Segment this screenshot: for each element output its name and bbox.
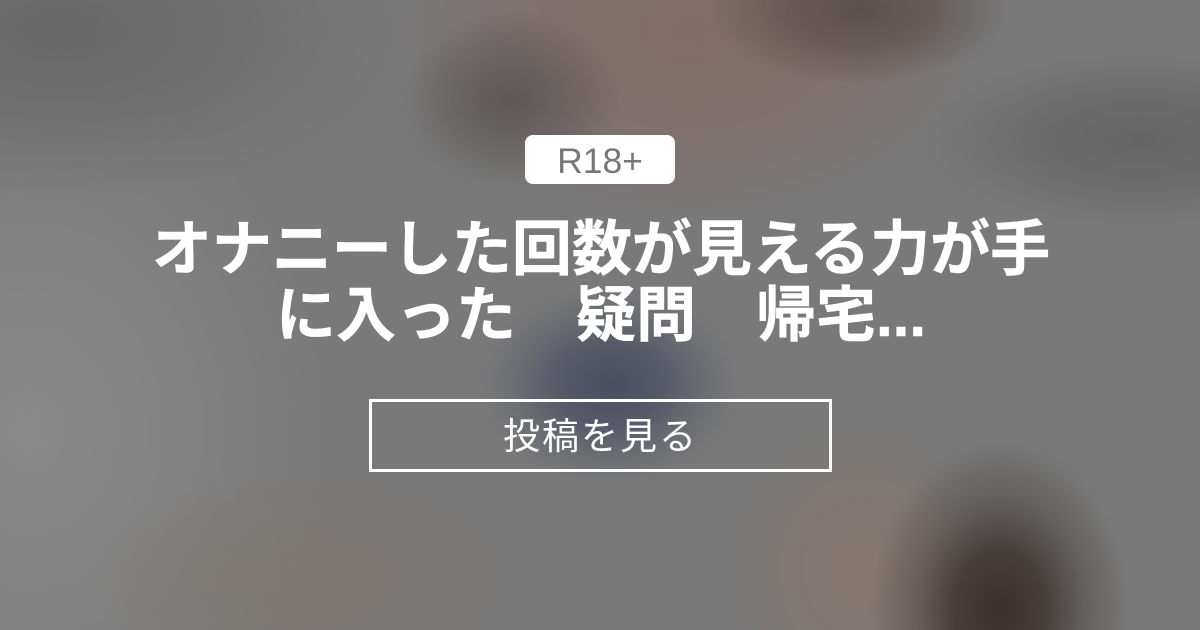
title: オナニーした回数が見える力が手 bbox=[152, 217, 1050, 283]
age rating badge: R18+ bbox=[557, 141, 643, 181]
view post button: 投稿を見る bbox=[503, 416, 698, 457]
title: に入った 疑問 帰宅... bbox=[276, 282, 926, 349]
view post button bbox=[369, 399, 832, 472]
age rating badge bbox=[525, 135, 675, 184]
title bbox=[152, 217, 1050, 349]
